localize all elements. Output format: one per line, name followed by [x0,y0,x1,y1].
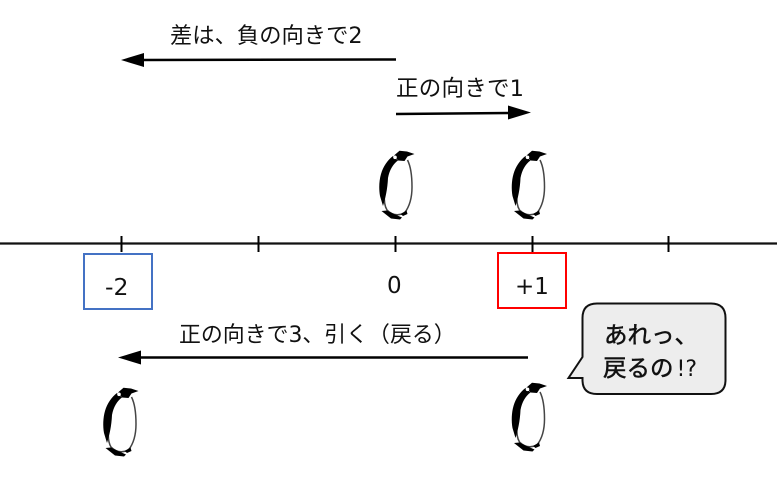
speech bubble: 戻るの!? [603,354,697,382]
arrow: subtract 3 [118,350,528,364]
arrow: negative direction 2 [121,53,396,67]
heading: subtract positive 3, go back: 正の向きで3、引く（戻る） [179,323,456,348]
penguin at -2 [103,388,138,456]
label: 0: 0 [387,273,402,299]
box: +1 label [498,253,566,308]
box: +1 label: +1 [515,274,549,300]
box: -2 label [84,254,152,309]
speech bubble [568,304,726,394]
penguin at 0 [379,151,414,220]
penguin at +1 [512,151,547,220]
arrow: positive direction 1 [396,106,531,120]
box: -2 label: -2 [105,273,128,301]
heading: difference in negative direction 2: 差は、負の向きで2 [170,23,363,49]
penguin at +1 lower [512,383,547,452]
number line axis [0,236,777,252]
heading: positive direction 1: 正の向きで1 [396,76,524,102]
speech bubble: あれっ、 [604,321,698,349]
